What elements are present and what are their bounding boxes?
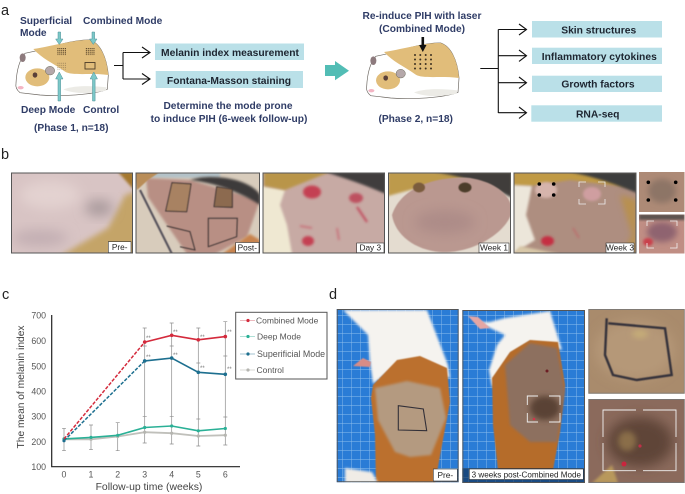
photo: detail lesion: [639, 214, 685, 254]
box: skin structures: Skin structures: [561, 25, 636, 36]
box: RNA-seq: [531, 105, 662, 122]
box: Fontana-Masson staining: [156, 71, 303, 88]
photo: three weeks post combined mode: [462, 310, 586, 484]
text: phase 1 objective: Determine the mode prone: [163, 101, 293, 112]
significance marks: **: [200, 366, 205, 372]
axes: [52, 315, 240, 467]
photo: day 3: [262, 172, 386, 254]
photo: week 1: [388, 172, 512, 254]
mode labels: Deep Mode: [21, 105, 76, 116]
photo: week 3: [513, 172, 637, 254]
error bars: [62, 322, 227, 451]
panel a: study design: [1, 3, 662, 134]
panel label d: d: [329, 287, 337, 303]
box: growth factors: Growth factors: [561, 79, 635, 90]
photo: pre-treatment animal: Pre-: [437, 470, 453, 480]
photo: detail marked skin: [588, 309, 685, 394]
axis title y: The mean of melanin index: [16, 326, 27, 448]
photo: three weeks post combined mode: 3 weeks post-Combined Mode: [472, 470, 581, 479]
series: deep mode: [62, 424, 227, 440]
photo: post: Post-: [238, 242, 257, 252]
text: phase 2 sample: (Phase 2, n=18): [378, 114, 453, 125]
x axis ticks: 3: [142, 470, 147, 480]
photo: pre-treatment animal: [336, 309, 459, 483]
photo: week 1: Week 1: [480, 243, 508, 253]
photo: detail pre-lesion: [639, 172, 685, 212]
box: melanin index measurement: [155, 44, 304, 60]
arrow: fork to phase 2 assays: [480, 24, 526, 118]
y axis ticks: 200: [31, 437, 46, 447]
significance marks: **: [146, 355, 151, 361]
x axis ticks: [62, 470, 228, 480]
photo: week 3: Week 3: [606, 243, 634, 253]
series: control: [62, 431, 227, 441]
legend: Control: [256, 365, 284, 375]
significance marks: **: [146, 336, 151, 342]
panel label c: c: [2, 287, 9, 303]
x axis ticks: 6: [223, 470, 228, 480]
panel b: time course photographs: [1, 147, 685, 256]
significance marks: **: [227, 330, 232, 336]
axis title x: Follow-up time (weeks): [96, 482, 202, 493]
box: melanin index measurement: Melanin index measurement: [161, 48, 300, 59]
photo: day 3: Day 3: [359, 243, 382, 253]
text: phase 1 objective: to induce PIH (6-week follow-up): [151, 114, 307, 125]
box: Fontana-Masson staining: Fontana-Masson staining: [167, 76, 291, 87]
x axis ticks: 1: [89, 470, 94, 480]
photo: detail lesion: [588, 399, 685, 483]
x axis ticks: 2: [115, 470, 120, 480]
box: RNA-seq: RNA-seq: [576, 109, 619, 120]
mode labels: Combined Mode: [83, 16, 163, 27]
y axis ticks: [31, 310, 46, 472]
y axis ticks: 400: [31, 386, 46, 396]
text: re-induce PIH heading: (Combined Mode): [379, 24, 465, 35]
mode labels: Superficial: [20, 16, 72, 27]
panel c: melanin index chart: [2, 287, 327, 493]
legend: Deep Mode: [257, 332, 301, 342]
text: re-induce PIH heading: Re-induce PIH with laser: [363, 11, 481, 22]
photo: post: [135, 172, 261, 254]
legend: Combined Mode: [256, 316, 319, 326]
arrow: fork to phase 1 assays: [114, 47, 150, 84]
series: combined mode: [64, 334, 227, 439]
mode labels: (Phase 1, n=18): [34, 123, 108, 134]
legend: [236, 312, 327, 379]
box: inflammatory cytokines: Inflammatory cytokines: [542, 52, 657, 63]
y axis ticks: 600: [31, 336, 46, 346]
significance marks: [146, 330, 232, 373]
photo: pre: [11, 172, 140, 256]
line chart: [16, 310, 240, 493]
y axis ticks: 300: [31, 412, 46, 422]
arrow: phase 1 to phase 2: [325, 61, 349, 80]
illustration: phase 2 guinea pig: [367, 43, 459, 99]
x axis ticks: 5: [196, 470, 201, 480]
mode labels: Control: [83, 105, 119, 116]
y axis ticks: 100: [31, 462, 46, 472]
panel label b: b: [1, 147, 9, 163]
illustration: phase 1 guinea pig: [16, 40, 108, 96]
panel d: combined mode photographs: [329, 287, 685, 484]
y axis ticks: 500: [31, 362, 46, 372]
arrows: laser mode pointers: [56, 32, 98, 101]
text: re-induce PIH heading: [363, 11, 481, 35]
significance marks: **: [227, 367, 232, 373]
significance marks: **: [173, 353, 178, 359]
series: superficial mode: [62, 356, 227, 442]
panel label a: a: [1, 3, 10, 19]
photo: pre: Pre-: [112, 242, 128, 252]
text: phase 1 objective: [151, 101, 307, 125]
significance marks: **: [173, 330, 178, 336]
box: growth factors: [532, 76, 662, 92]
box: skin structures: [532, 21, 662, 38]
x axis ticks: 0: [62, 470, 67, 480]
mode labels: [20, 16, 163, 134]
x axis ticks: 4: [169, 470, 174, 480]
y axis ticks: 700: [31, 310, 46, 320]
arrow: laser on phase 2 pig: [419, 37, 426, 52]
mode labels: Mode: [20, 28, 47, 39]
box: inflammatory cytokines: [532, 48, 662, 64]
significance marks: **: [200, 335, 205, 341]
legend: Superificial Mode: [257, 349, 325, 359]
